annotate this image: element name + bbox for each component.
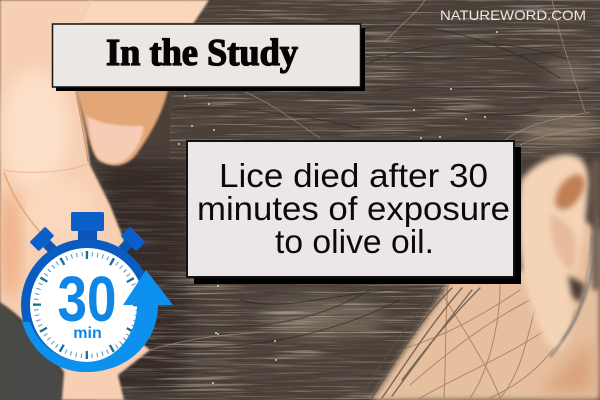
hair texture [170,0,600,160]
scalp skin behind the ear [372,190,600,400]
hand holding the hair [0,0,209,400]
callout text: Lice died after 30 [219,157,488,194]
top crown [71,212,104,231]
hair strands [150,0,600,398]
callout text: minutes of exposure [197,190,510,227]
minor ticks [35,253,139,357]
callout text [197,157,510,260]
brand label: NATUREWORD.COM [440,7,586,23]
icon: 30 minute stopwatch [21,212,173,372]
rotating arrow [22,305,158,372]
ear [518,155,598,357]
side buttons [30,227,61,258]
nits on the hair [178,31,498,384]
face [30,248,144,362]
main hand [0,0,150,400]
callout text: to olive oil. [275,223,434,260]
grey sleeve [0,305,65,400]
callout panel [187,141,521,284]
heading: In the Study [106,32,298,74]
major ticks [36,254,138,356]
thumbnail [87,116,143,164]
hand highlights [1,70,69,190]
unit: min [73,325,102,342]
case [21,239,153,371]
number: 30 [58,263,116,335]
heading panel [52,24,365,91]
top finger [80,0,209,24]
thumb [76,90,168,165]
